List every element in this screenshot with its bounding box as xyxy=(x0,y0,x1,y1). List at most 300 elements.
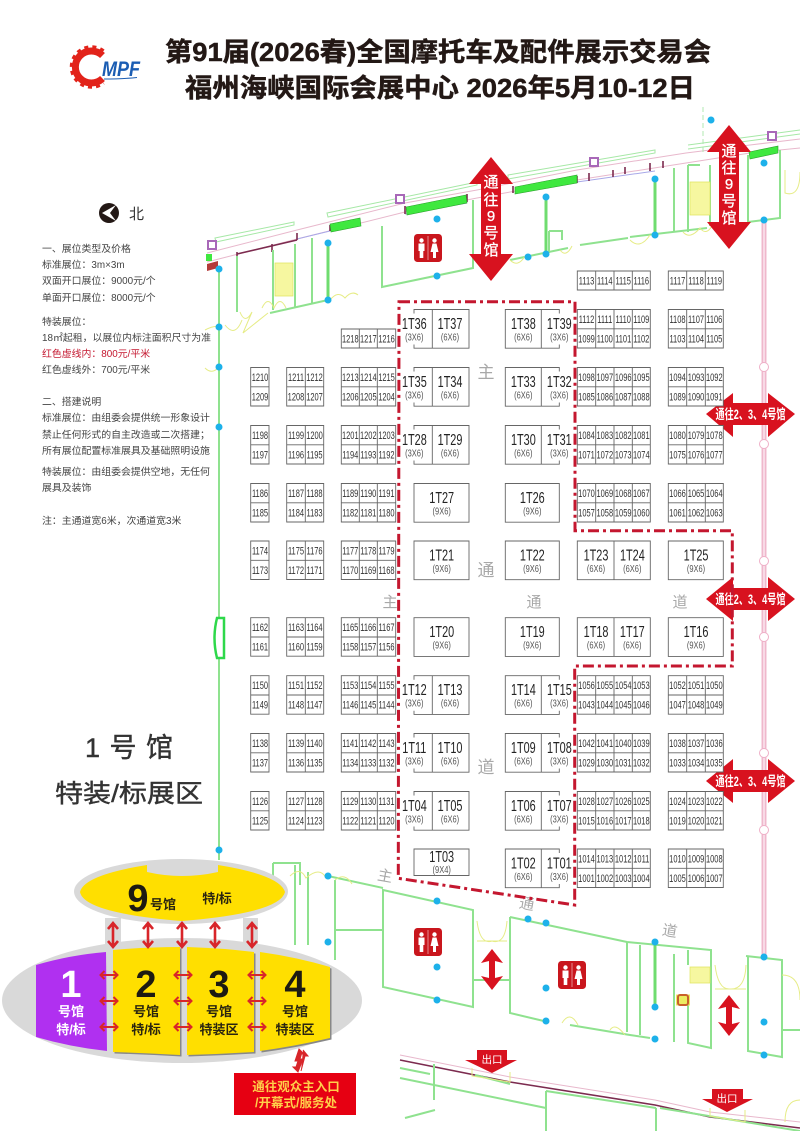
standard booths block: 1032 xyxy=(633,756,650,769)
standard booths block: 1110 xyxy=(615,312,631,325)
text: price and build notes: 特装展位： xyxy=(42,315,91,328)
standard booths block: 1042 xyxy=(578,736,595,749)
standard booths block: 1179 xyxy=(378,544,395,557)
icon: north marker: 北 xyxy=(129,206,144,223)
standard booths block: 1162 xyxy=(252,621,268,634)
standard booths block: 1035 xyxy=(706,756,723,769)
standard booths block: 1133 xyxy=(360,756,376,769)
special booths block: (6X6) xyxy=(441,813,459,825)
road labels: 主 xyxy=(478,363,494,382)
standard booths block: 1188 xyxy=(306,486,323,499)
standard booths block: 1104 xyxy=(688,332,704,345)
road labels: 通 xyxy=(526,594,542,611)
pink corridor on right xyxy=(760,220,768,958)
arrow: to hall 9 (centre): 号 xyxy=(483,225,499,242)
callout: main entrance: 通往观众主入口 xyxy=(252,1079,340,1094)
standard booths block: 1173 xyxy=(252,563,268,576)
standard booths block: 1065 xyxy=(688,486,704,499)
title xyxy=(165,37,711,103)
standard booths block: 1060 xyxy=(633,506,650,519)
title: 第91届(2026春)全国摩托车及配件展示交易会 xyxy=(165,37,711,67)
standard booths block: 1101 xyxy=(615,332,631,345)
special booths block: (3X6) xyxy=(405,755,424,767)
arrow: to halls 2,3,4 upper xyxy=(706,393,795,437)
standard booths block: 1130 xyxy=(360,794,376,807)
standard booths block: 1127 xyxy=(288,794,304,807)
standard booths block: 1116 xyxy=(634,274,649,287)
hall 9: 号馆 xyxy=(150,897,176,912)
standard booths block: 1007 xyxy=(706,871,723,884)
standard booths block: 1122 xyxy=(342,814,358,827)
standard booths block: 1216 xyxy=(378,332,395,345)
arrow: to hall 9 (centre): 往 xyxy=(483,192,499,209)
standard booths block: 1057 xyxy=(578,506,595,519)
heading: hall 1 xyxy=(55,733,203,808)
standard booths block: 1212 xyxy=(306,370,323,383)
standard booths block: 1169 xyxy=(360,563,376,576)
special booths block: 1T03 xyxy=(429,848,454,866)
standard booths block: 1034 xyxy=(688,756,704,769)
hall 4: 特装区 xyxy=(275,1022,315,1037)
standard booths block: 1170 xyxy=(342,563,358,576)
standard booths block: 1166 xyxy=(360,621,376,634)
standard booths block: 1198 xyxy=(252,428,268,441)
text: price and build notes: 双面开口展位：9000元/个 xyxy=(42,274,156,287)
standard booths block: 1053 xyxy=(633,679,650,692)
standard booths block: 1174 xyxy=(252,544,268,557)
standard booths block: 1097 xyxy=(596,370,613,383)
arrow: two-way bottom right xyxy=(718,995,740,1036)
standard booths block: 1137 xyxy=(252,756,268,769)
standard booths block: 1160 xyxy=(288,640,304,653)
special booths block: (6X6) xyxy=(441,755,459,767)
text: price and build notes: 特装展位：由组委会提供空地，无任何 xyxy=(42,465,210,478)
road labels: 道 xyxy=(672,594,688,611)
standard booths block: 1066 xyxy=(669,486,686,499)
standard booths block: 1194 xyxy=(342,448,358,461)
standard booths block: 1084 xyxy=(578,428,595,441)
arrow: to hall 9 (centre): 通 xyxy=(483,174,499,191)
standard booths block: 1215 xyxy=(378,370,395,383)
special booths block: 1T01 xyxy=(547,854,572,872)
hall 3: 特装区 xyxy=(199,1022,239,1037)
standard booths block: 1152 xyxy=(306,679,323,692)
arrow: to hall 9 (centre): 9 xyxy=(487,208,495,225)
standard booths block: 1149 xyxy=(252,698,268,711)
special booths block: 1T10 xyxy=(438,739,463,757)
special booths block: (6X6) xyxy=(441,389,459,401)
special booths block: 1T29 xyxy=(438,431,462,449)
standard booths block: 1184 xyxy=(288,506,304,519)
special booths block: 1T19 xyxy=(520,623,545,641)
road labels: 主 xyxy=(376,867,394,886)
standard booths block: 1049 xyxy=(706,698,723,711)
standard booths block: 1006 xyxy=(688,871,704,884)
title: 福州海峡国际会展中心 2026年5月10-12日 xyxy=(185,73,695,103)
standard booths block: 1203 xyxy=(378,428,395,441)
special booths block: (3X6) xyxy=(405,698,424,709)
standard booths block: 1182 xyxy=(342,506,358,519)
standard booths block: 1105 xyxy=(706,332,722,345)
special booths block: (9X6) xyxy=(433,563,451,574)
arrow: two-way bottom left xyxy=(481,949,503,990)
hall 1: 号馆 xyxy=(58,1004,84,1019)
standard booths block: 1056 xyxy=(578,679,595,692)
special booths block: 1T16 xyxy=(684,623,708,641)
special booths block: 1T37 xyxy=(438,315,462,333)
standard booths block: 1071 xyxy=(578,448,595,461)
blue column dots xyxy=(216,116,768,1058)
arrow: to hall 9 (right): 号 xyxy=(721,193,737,210)
floor plan: top wall and rooms xyxy=(206,107,800,333)
standard booths block: 1199 xyxy=(288,428,304,441)
callout: main entrance xyxy=(234,1073,356,1115)
standard booths block: 1020 xyxy=(688,814,704,827)
standard booths block: 1171 xyxy=(306,563,323,576)
text: price and build notes: 展具及装饰 xyxy=(42,481,92,494)
standard booths block: 1095 xyxy=(633,370,650,383)
standard booths block: 1068 xyxy=(615,486,632,499)
standard booths block: 1094 xyxy=(669,370,686,383)
special booths block: 1T05 xyxy=(438,797,463,815)
red dash-dot zone outline xyxy=(398,302,732,905)
standard booths block: 1023 xyxy=(688,794,704,807)
standard booths block: 1195 xyxy=(306,448,323,461)
hall 3: 号馆 xyxy=(206,1004,232,1019)
standard booths block: 1214 xyxy=(360,370,377,383)
road labels: 道 xyxy=(478,758,494,777)
standard booths block: 1107 xyxy=(688,312,704,325)
standard booths block: 1164 xyxy=(306,621,323,634)
standard booths block: 1163 xyxy=(288,621,304,634)
special booths block: (3X6) xyxy=(550,331,569,343)
standard booths block: 1187 xyxy=(288,486,304,499)
standard booths block: 1206 xyxy=(342,390,359,403)
standard booths block: 1159 xyxy=(306,640,323,653)
standard booths block: 1180 xyxy=(378,506,395,519)
standard booths block: 1073 xyxy=(615,448,632,461)
standard booths block: 1190 xyxy=(360,486,376,499)
arrow: to hall 9 (centre) xyxy=(469,157,513,281)
special booths block: 1T36 xyxy=(402,315,427,333)
standard booths block: 1168 xyxy=(378,563,395,576)
hall 4 xyxy=(260,952,332,1052)
road labels: 道 xyxy=(661,922,679,941)
standard booths block: 1218 xyxy=(342,332,359,345)
special booths block: (3X6) xyxy=(405,389,424,401)
hall 2: 号馆 xyxy=(133,1004,159,1019)
arrow: to hall 9 (right) xyxy=(707,125,751,249)
special booths block: (9X6) xyxy=(687,563,705,574)
standard booths block: 1009 xyxy=(688,852,704,865)
standard booths block: 1202 xyxy=(360,428,377,441)
special booths block: (6X6) xyxy=(514,331,533,343)
standard booths block: 1031 xyxy=(615,756,632,769)
icon: restroom top xyxy=(414,234,442,262)
connector arrows xyxy=(100,923,266,1031)
special booths block: 1T27 xyxy=(429,489,454,507)
standard booths block: 1090 xyxy=(688,390,704,403)
arrow: to hall 9 (right): 通 xyxy=(721,143,737,160)
special booths block: (3X6) xyxy=(550,389,569,401)
text: price and build notes: 所有展位配置标准展具及基础照明设施 xyxy=(42,444,210,457)
standard booths block: 1154 xyxy=(360,679,376,692)
special booths block: (3X6) xyxy=(550,447,569,459)
standard booths block: 1148 xyxy=(288,698,304,711)
standard booths block: 1061 xyxy=(669,506,686,519)
standard booths block: 1099 xyxy=(578,332,595,345)
standard booths block: 1197 xyxy=(252,448,268,461)
standard booths block: 1108 xyxy=(669,312,686,325)
standard booths block: 1161 xyxy=(252,640,268,653)
icon: north marker xyxy=(99,203,144,223)
special booths block: 1T22 xyxy=(520,546,545,564)
standard booths block: 1012 xyxy=(615,852,632,865)
text: price and build notes: 红色虚线外：700元/平米 xyxy=(42,363,150,376)
standard booths block: 1119 xyxy=(707,274,722,287)
standard booths block: 1103 xyxy=(669,332,686,345)
standard booths block: 1120 xyxy=(378,814,395,827)
special booths block: (6X6) xyxy=(441,447,459,459)
standard booths block: 1102 xyxy=(633,332,649,345)
standard booths block: 1144 xyxy=(378,698,395,711)
special booths block: (3X6) xyxy=(550,813,569,825)
special booths block: (6X6) xyxy=(514,698,533,709)
standard booths block: 1010 xyxy=(669,852,686,865)
standard booths block: 1147 xyxy=(306,698,323,711)
standard booths block: 1158 xyxy=(342,640,358,653)
standard booths block: 1075 xyxy=(669,448,686,461)
exit arrow 2: 出口 xyxy=(716,1092,738,1105)
standard booths block: 1124 xyxy=(288,814,304,827)
arrow: to halls 2,3,4 middle xyxy=(706,577,795,621)
standard booths block: 1013 xyxy=(596,852,613,865)
standard booths block: 1109 xyxy=(633,312,649,325)
standard booths block: 1036 xyxy=(706,736,723,749)
standard booths block: 1172 xyxy=(288,563,304,576)
special booths block: 1T33 xyxy=(511,373,536,391)
road labels: 通 xyxy=(518,895,536,914)
special booths block: 1T15 xyxy=(547,681,572,699)
heading: hall 1: 1 号 馆 xyxy=(85,733,173,763)
standard booths block: 1175 xyxy=(288,544,304,557)
standard booths block: 1181 xyxy=(360,506,376,519)
special booths block: 1T25 xyxy=(684,546,709,564)
hall 9: 9 xyxy=(127,878,149,920)
standard booths block: 1054 xyxy=(615,679,632,692)
standard booths block: 1018 xyxy=(633,814,650,827)
hall 1: 特/标 xyxy=(56,1022,86,1037)
standard booths block: 1005 xyxy=(669,871,686,884)
hall 2: 2 xyxy=(135,964,157,1006)
standard booths block: 1098 xyxy=(578,370,595,383)
special booths block: 1T17 xyxy=(620,623,645,641)
text: price and build notes: 标准展位：由组委会提供统一形象设计 xyxy=(42,411,210,424)
standard booths block: 1191 xyxy=(378,486,395,499)
special booths block: 1T20 xyxy=(429,623,454,641)
special booths block: (6X6) xyxy=(441,698,459,709)
hall 4: 号馆 xyxy=(282,1004,308,1019)
standard booths block: 1069 xyxy=(596,486,613,499)
text: price and build notes: 禁止任何形式的自主改造或二次搭建； xyxy=(42,428,210,441)
standard booths block: 1080 xyxy=(669,428,686,441)
standard booths block: 1200 xyxy=(306,428,323,441)
standard booths block: 1093 xyxy=(688,370,704,383)
special booths block: 1T31 xyxy=(547,431,572,449)
special booths block: 1T11 xyxy=(402,739,426,757)
special booths block: (6X6) xyxy=(514,389,533,401)
standard booths block: 1003 xyxy=(615,871,632,884)
standard booths block: 1085 xyxy=(578,390,595,403)
standard booths block: 1157 xyxy=(360,640,376,653)
standard booths block: 1076 xyxy=(688,448,704,461)
standard booths block: 1063 xyxy=(706,506,723,519)
standard booths block: 1002 xyxy=(596,871,613,884)
standard booths block: 1040 xyxy=(615,736,632,749)
hall 3: 3 xyxy=(208,964,230,1006)
standard booths block: 1074 xyxy=(633,448,650,461)
special booths block: (9X6) xyxy=(523,640,542,651)
special booths block: (9X6) xyxy=(433,640,451,651)
standard booths block: 1155 xyxy=(378,679,395,692)
standard booths block: 1008 xyxy=(706,852,723,865)
special booths block: 1T28 xyxy=(402,431,427,449)
exit arrow 2 xyxy=(702,1089,753,1112)
standard booths block: 1029 xyxy=(578,756,595,769)
standard booths block: 1126 xyxy=(252,794,268,807)
standard booths block: 1024 xyxy=(669,794,686,807)
special booths block: (6X6) xyxy=(514,447,533,459)
standard booths block xyxy=(251,271,723,888)
special booths block: 1T32 xyxy=(547,373,572,391)
standard booths block: 1145 xyxy=(360,698,376,711)
special booths block: (9X6) xyxy=(523,505,542,517)
standard booths block: 1070 xyxy=(578,486,595,499)
arrow: to entrance xyxy=(293,1049,308,1072)
hall 9 xyxy=(74,859,288,948)
standard booths block: 1011 xyxy=(633,852,649,865)
standard booths block: 1196 xyxy=(288,448,304,461)
special booths block: 1T18 xyxy=(584,623,609,641)
standard booths block: 1217 xyxy=(360,332,377,345)
special booths block: 1T07 xyxy=(547,797,572,815)
standard booths block: 1183 xyxy=(306,506,323,519)
standard booths block: 1096 xyxy=(615,370,632,383)
standard booths block: 1051 xyxy=(688,679,704,692)
standard booths block: 1072 xyxy=(596,448,613,461)
standard booths block: 1167 xyxy=(378,621,395,634)
arrow: to halls 2,3,4 lower xyxy=(706,759,795,803)
arrow: to hall 9 (right): 馆 xyxy=(721,210,737,227)
special booths block: 1T14 xyxy=(511,681,536,699)
special booths block: (3X6) xyxy=(550,698,569,709)
standard booths block: 1143 xyxy=(378,736,395,749)
text: price and build notes: 红色虚线内：800元/平米 xyxy=(42,347,150,360)
standard booths block: 1128 xyxy=(306,794,323,807)
standard booths block: 1189 xyxy=(342,486,358,499)
standard booths block: 1131 xyxy=(378,794,395,807)
hall 9: 特/标 xyxy=(202,891,232,906)
standard booths block: 1134 xyxy=(342,756,358,769)
standard booths block: 1019 xyxy=(669,814,686,827)
special booths block: (6X6) xyxy=(623,563,642,574)
logo: MPF gear: MPF xyxy=(102,58,141,81)
standard booths block: 1046 xyxy=(633,698,650,711)
standard booths block: 1210 xyxy=(252,370,268,383)
standard booths block: 1045 xyxy=(615,698,632,711)
special booths block: 1T23 xyxy=(584,546,608,564)
icon: restroom bottom left xyxy=(414,928,442,956)
standard booths block: 1177 xyxy=(342,544,358,557)
standard booths block: 1118 xyxy=(688,274,704,287)
standard booths block: 1017 xyxy=(615,814,632,827)
standard booths block: 1151 xyxy=(288,679,304,692)
standard booths block: 1087 xyxy=(615,390,632,403)
special booths block: (9X6) xyxy=(687,640,705,651)
text: price and build notes: 注：主通道宽6米，次通道宽3米 xyxy=(42,514,181,527)
standard booths block: 1064 xyxy=(706,486,723,499)
special booths block xyxy=(402,310,723,888)
standard booths block: 1039 xyxy=(633,736,650,749)
special booths block: 1T09 xyxy=(511,739,536,757)
standard booths block: 1038 xyxy=(669,736,686,749)
standard booths block: 1014 xyxy=(578,852,595,865)
standard booths block: 1112 xyxy=(579,312,594,325)
special booths block: (3X6) xyxy=(550,755,569,767)
standard booths block: 1050 xyxy=(706,679,723,692)
special booths block: 1T12 xyxy=(402,681,427,699)
standard booths block: 1086 xyxy=(596,390,613,403)
standard booths block: 1146 xyxy=(342,698,358,711)
standard booths block: 1062 xyxy=(688,506,704,519)
special booths block: (3X6) xyxy=(550,871,569,882)
standard booths block: 1026 xyxy=(615,794,632,807)
callout: main entrance: /开幕式/服务处 xyxy=(255,1095,337,1110)
standard booths block: 1027 xyxy=(596,794,613,807)
standard booths block: 1025 xyxy=(633,794,650,807)
standard booths block: 1123 xyxy=(306,814,323,827)
standard booths block: 1022 xyxy=(706,794,723,807)
special booths block: 1T24 xyxy=(620,546,645,564)
special booths block: (6X6) xyxy=(587,563,605,574)
arrow: to hall 9 (centre): 馆 xyxy=(483,242,499,259)
standard booths block: 1185 xyxy=(252,506,268,519)
standard booths block: 1156 xyxy=(378,640,395,653)
standard booths block: 1209 xyxy=(252,390,268,403)
standard booths block: 1132 xyxy=(378,756,395,769)
text: price and build notes: 一、展位类型及价格 xyxy=(42,242,131,255)
standard booths block: 1078 xyxy=(706,428,723,441)
standard booths block: 1211 xyxy=(288,370,304,383)
floor plan: bottom rooms and walls xyxy=(273,863,800,1131)
special booths block: (9X6) xyxy=(433,505,451,517)
road labels xyxy=(376,363,688,941)
arrow: to hall 9 (right): 往 xyxy=(721,160,737,177)
special booths block: 1T08 xyxy=(547,739,572,757)
special booths block: (6X6) xyxy=(587,640,605,651)
exit arrow 1: 出口 xyxy=(482,1053,502,1066)
standard booths block: 1016 xyxy=(596,814,613,827)
standard booths block: 1138 xyxy=(252,736,268,749)
standard booths block: 1089 xyxy=(669,390,686,403)
standard booths block: 1186 xyxy=(252,486,268,499)
standard booths block: 1033 xyxy=(669,756,686,769)
standard booths block: 1001 xyxy=(578,871,595,884)
special booths block: (6X6) xyxy=(623,640,642,651)
standard booths block: 1079 xyxy=(688,428,704,441)
standard booths block: 1204 xyxy=(378,390,395,403)
standard booths block: 1192 xyxy=(378,448,395,461)
